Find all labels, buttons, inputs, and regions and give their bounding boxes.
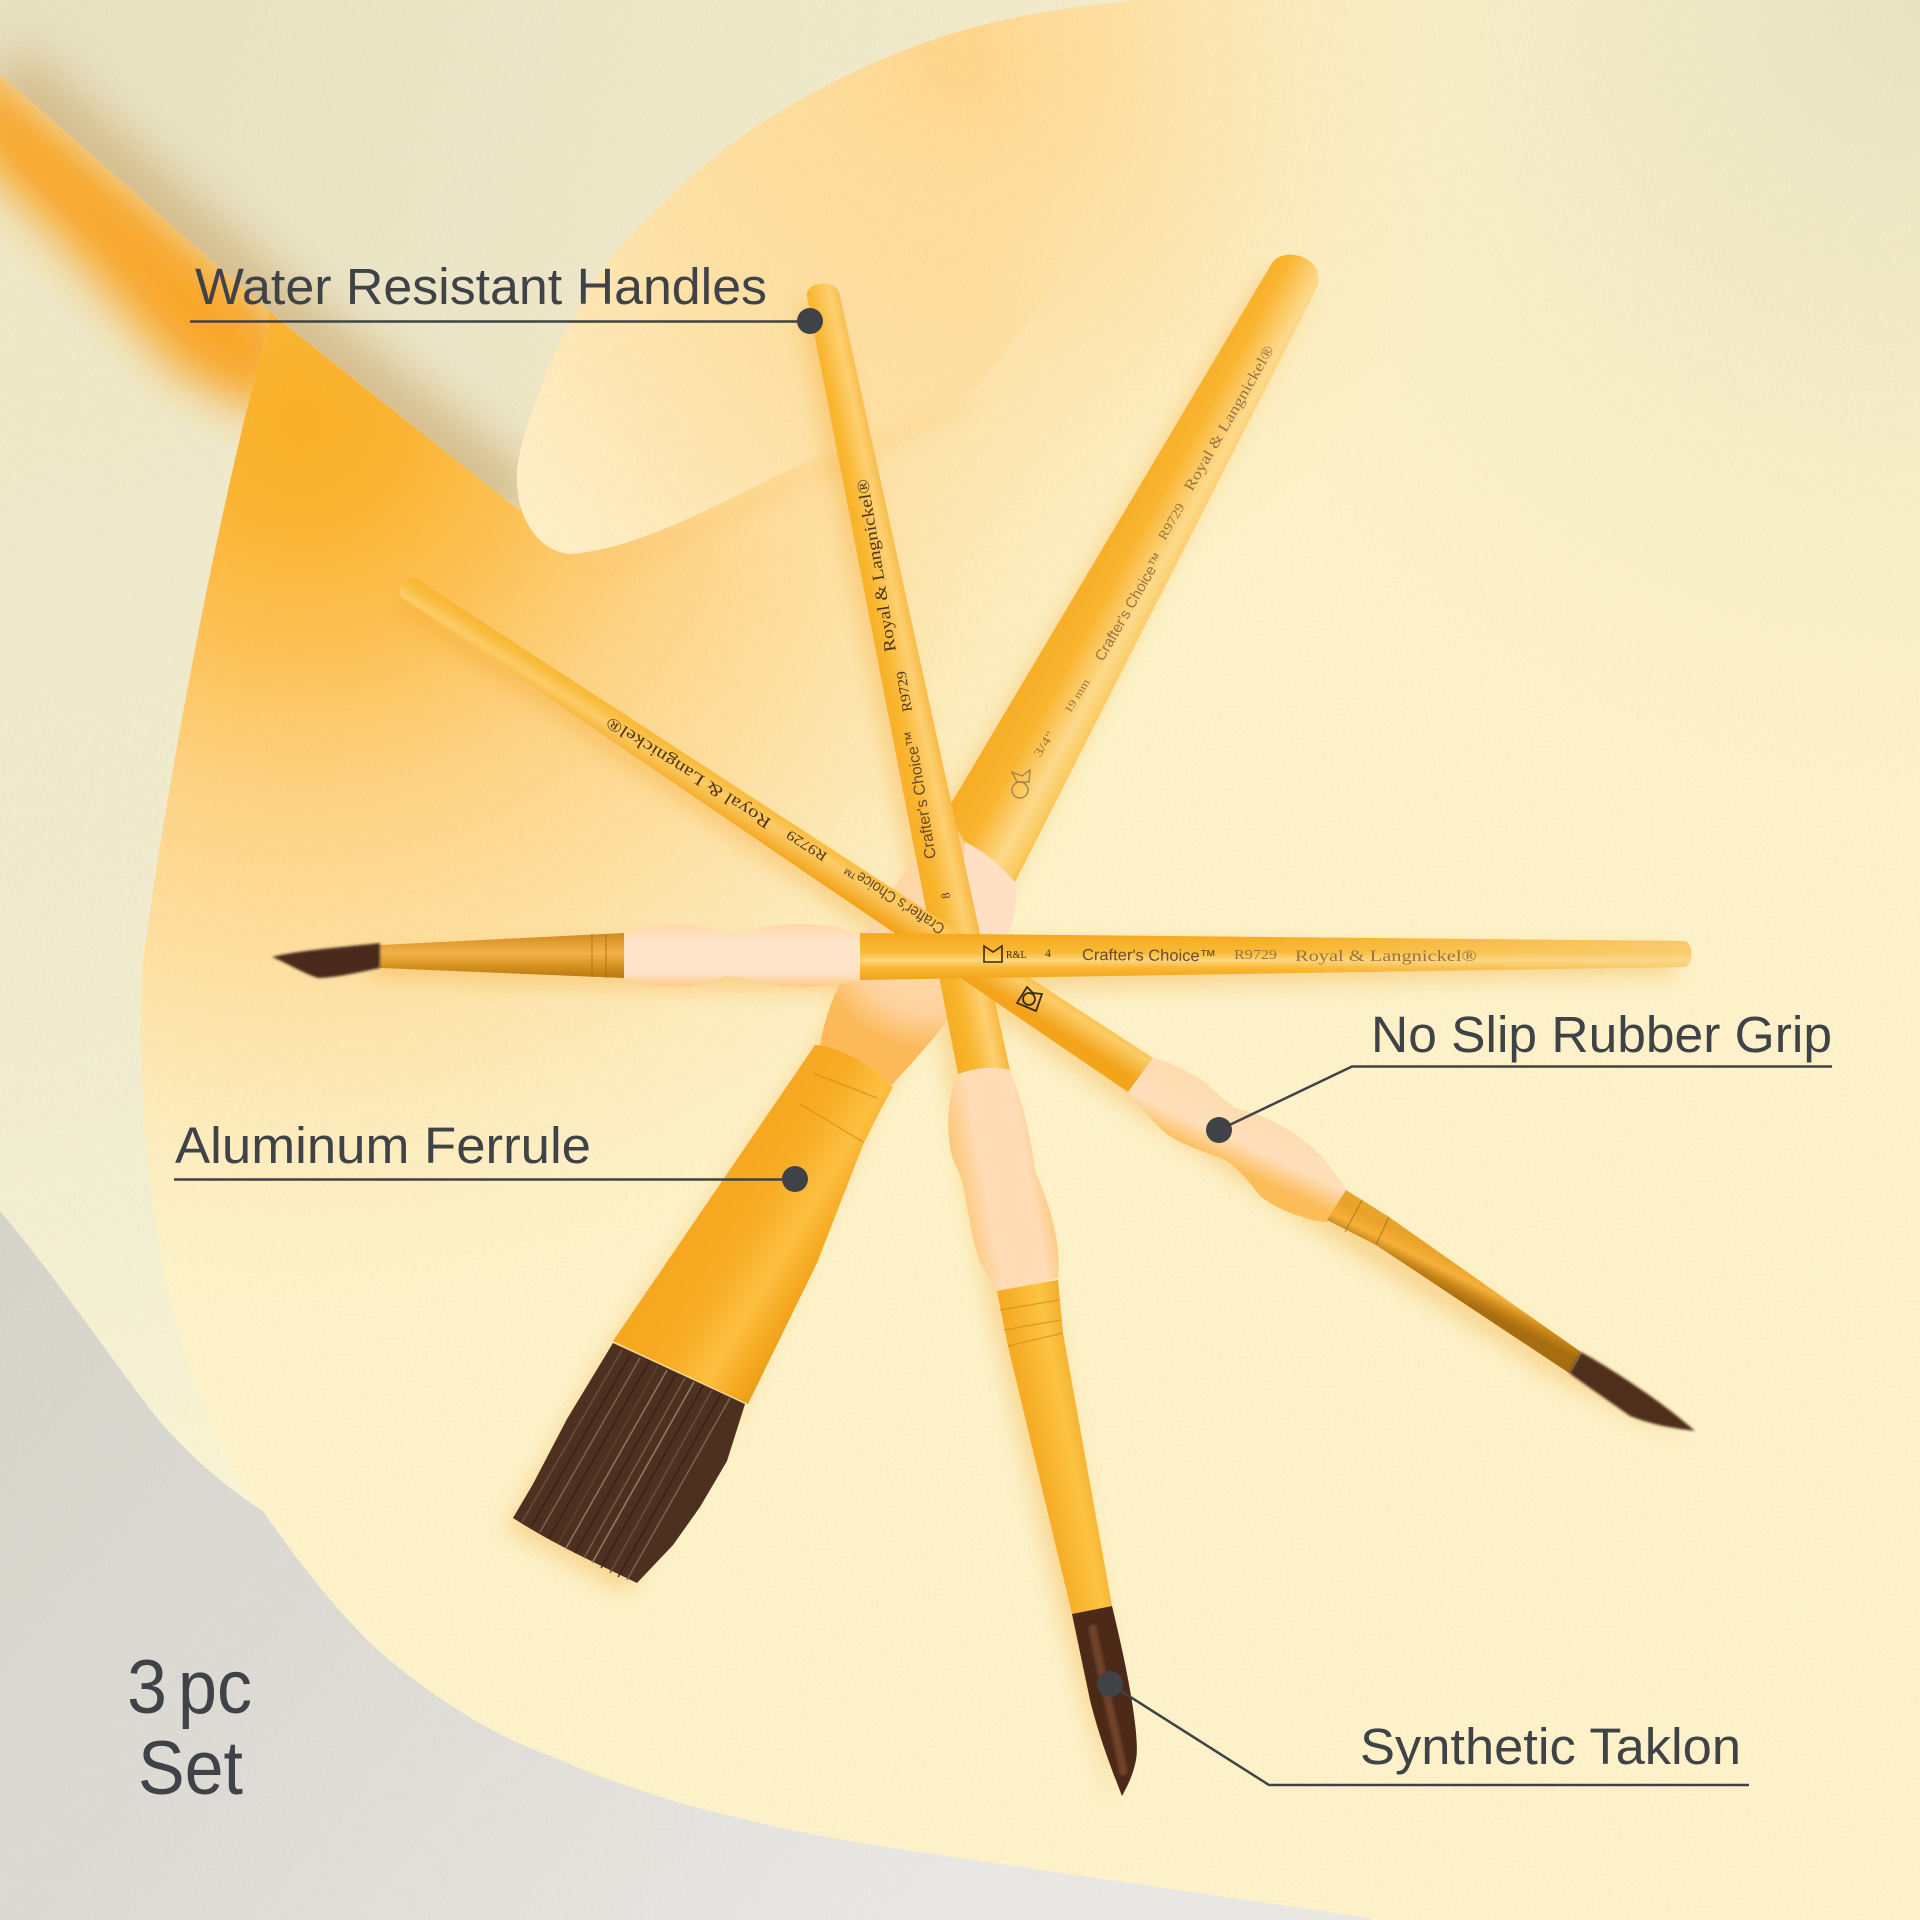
gray table surface (0, 1211, 1400, 1920)
brush C bristles (272, 943, 380, 978)
set size label: 3 (127, 1645, 167, 1730)
shaded fold on flap (0, 74, 520, 511)
brush D printing (602, 713, 1042, 1011)
brush A printing: R9729 (1155, 500, 1188, 542)
brush D grip (1128, 1058, 1346, 1222)
icon: crown logo C (984, 946, 1027, 962)
brush C printing (984, 946, 1477, 965)
callout: No Slip Rubber Grip (1206, 1006, 1832, 1143)
brush A grip (820, 820, 1015, 1085)
brush C ferrule bands (592, 934, 606, 978)
brush C printing: 4 (1045, 946, 1051, 960)
brush D bristles (1569, 1352, 1695, 1431)
icon: crown logo D (1017, 987, 1042, 1011)
callout: Aluminum Ferrule (174, 1117, 808, 1192)
top flap of paper (0, 0, 1135, 511)
brush B printing: R9729 (895, 670, 916, 713)
brush B printing: Royal & Langnickel® (853, 478, 900, 653)
brush A ferrule bands (800, 1073, 877, 1142)
brush C printing: R9729 (1234, 948, 1277, 963)
brush A printing: 19 mm (1062, 677, 1093, 716)
callout: No Slip Rubber Grip: No Slip Rubber Grip (1371, 1006, 1832, 1063)
brush C printing: Royal & Langnickel® (1295, 948, 1477, 965)
paper curl lobe (517, 3, 1120, 554)
brush B printing: Crafter's Choice™ (902, 729, 940, 860)
icon: crown logo A (1012, 770, 1030, 798)
soft shadow under curl (718, 396, 970, 522)
brush D ferrule bands (1345, 1200, 1389, 1245)
brush A handle (946, 255, 1319, 882)
brush C printing: Crafter's Choice™ (1082, 947, 1216, 965)
set size label: pc (178, 1645, 252, 1730)
brush A printing: Royal & Langnickel® (1182, 343, 1278, 494)
brush A bristles (513, 1343, 745, 1583)
brush A: large flat brush (513, 255, 1319, 1583)
brush D printing: R9729 (784, 826, 830, 863)
brush A ferrule (613, 1045, 893, 1404)
brush D handle (400, 578, 1153, 1092)
brush D printing: Crafter's Choice™ (841, 860, 948, 937)
brush D: diagonal round brush (400, 578, 1695, 1431)
brush A printing (1012, 343, 1278, 798)
brush B printing (853, 478, 953, 900)
set size label (127, 1645, 252, 1811)
brush D printing: Royal & Langnickel® (602, 713, 774, 833)
icon: crown logo C: R&L (1006, 950, 1027, 961)
brush D ferrule (1327, 1190, 1581, 1373)
brush C: horizontal round brush (272, 924, 1692, 987)
brush C handle pale end (1250, 937, 1692, 974)
callout: Water Resistant Handles (190, 258, 823, 334)
brush B ferrule (997, 1280, 1112, 1614)
brush A printing: Crafter's Choice™ (1092, 550, 1167, 664)
callout: Synthetic Taklon: Synthetic Taklon (1360, 1718, 1741, 1775)
brush C grip (624, 924, 860, 987)
callout: Synthetic Taklon (1097, 1671, 1749, 1785)
brush A printing: 3/4" (1031, 728, 1057, 760)
brush C handle (860, 933, 1692, 980)
brush B printing: 8 (938, 892, 953, 900)
set size label: Set (138, 1726, 243, 1811)
brush B bristles (1072, 1606, 1137, 1796)
brush B handle (807, 283, 1010, 1074)
orange fold shadow on left sheet (0, 74, 269, 444)
callout: Water Resistant Handles: Water Resistant Handles (195, 258, 767, 315)
brush B: medium round brush (807, 283, 1137, 1796)
brush B grip (948, 1068, 1059, 1291)
brush A handle exposed grip end (960, 842, 1017, 945)
soft brush shadows (371, 274, 1686, 1805)
brush C ferrule (380, 933, 624, 978)
brush B ferrule bands (1000, 1300, 1063, 1346)
callout: Aluminum Ferrule: Aluminum Ferrule (175, 1117, 591, 1174)
